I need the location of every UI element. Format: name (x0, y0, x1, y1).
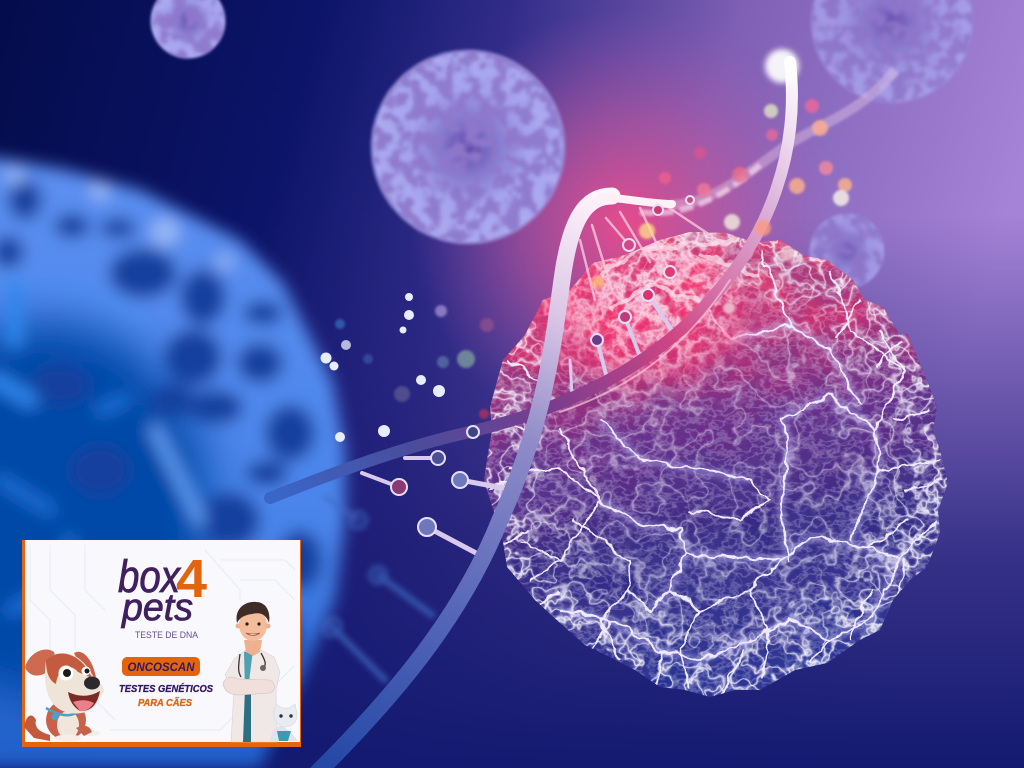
icon: cartoon cat (270, 704, 298, 741)
blurred cell centre (370, 49, 566, 245)
caption: PARA CÃES (138, 696, 192, 709)
cell pale lumps (538, 232, 766, 406)
main tumour cell (484, 232, 948, 697)
DNA rung balls (391, 196, 694, 536)
blurred cell top left (150, 0, 226, 59)
caption: TESTES GENÉTICOS (119, 682, 213, 695)
logo: box4 pets (118, 549, 207, 641)
DNA rungs front (362, 205, 725, 553)
icon: cartoon dog (24, 649, 104, 742)
back DNA strand upper right (640, 70, 895, 213)
floating particles (320, 99, 852, 442)
product card (22, 540, 301, 747)
icon: cartoon doctor (223, 602, 280, 742)
badge: Oncoscan: ONCOSCAN (128, 660, 195, 674)
cell ridges (490, 250, 945, 695)
blurred cell top right (810, 0, 974, 104)
cell ridges glow (560, 325, 900, 660)
large blurred blue cell (0, 155, 345, 768)
card background (22, 540, 301, 747)
cell pale highlights (600, 240, 760, 310)
blurred cell right (809, 213, 885, 289)
logo: box4 pets: pets (121, 587, 193, 629)
DNA strand main (318, 196, 672, 768)
badge: Oncoscan (122, 657, 200, 676)
cell texture (484, 232, 948, 696)
DNA strand crossing to top (270, 62, 792, 498)
blurred back DNA rungs (323, 497, 432, 680)
cell hot pink top (530, 245, 750, 385)
caption (119, 682, 213, 709)
logo: box4 pets: TESTE DE DNA (135, 630, 199, 641)
logo: box4 pets: box (118, 551, 181, 602)
logo: box4 pets: 4 (176, 549, 207, 609)
DNA top glow (765, 49, 799, 83)
